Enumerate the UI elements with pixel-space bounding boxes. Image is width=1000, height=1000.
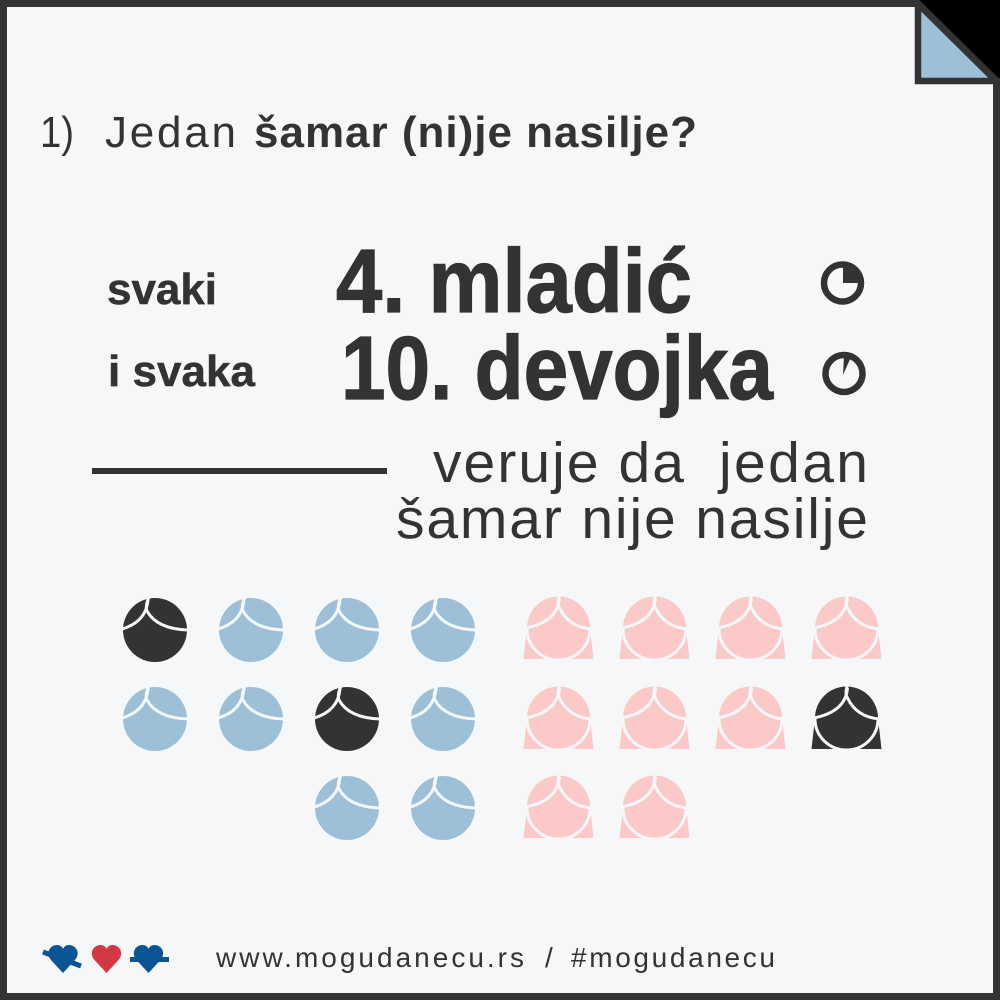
statistic: boys: svaki <box>107 265 217 314</box>
conclusion text <box>396 431 868 551</box>
footer website and hashtag: / <box>545 942 553 973</box>
statistic: girls: i svaka <box>108 347 256 396</box>
conclusion text: jedan <box>717 431 868 495</box>
footer website and hashtag: #mogudanecu <box>571 942 775 973</box>
footer website and hashtag <box>215 942 775 973</box>
title: 1) <box>40 108 74 157</box>
divider line <box>92 468 387 474</box>
statistic: girls: 10. devojka <box>341 319 774 419</box>
conclusion text: veruje da <box>433 431 684 495</box>
title <box>40 108 697 157</box>
title: šamar (ni)je nasilje? <box>254 108 697 157</box>
conclusion text: šamar nije nasilje <box>396 487 868 551</box>
icon: quarter pie <box>824 262 864 302</box>
statistic: boys <box>107 232 692 332</box>
footer website and hashtag: www.mogudanecu.rs <box>215 942 524 973</box>
icon: one-tenth pie <box>826 355 862 392</box>
statistic: girls <box>108 319 774 419</box>
footer icons: hearts <box>43 945 169 973</box>
pictogram: young women <box>524 595 882 839</box>
title: Jedan <box>105 108 236 157</box>
statistic: boys: 4. mladić <box>336 232 692 332</box>
pictogram: young men <box>122 597 476 840</box>
